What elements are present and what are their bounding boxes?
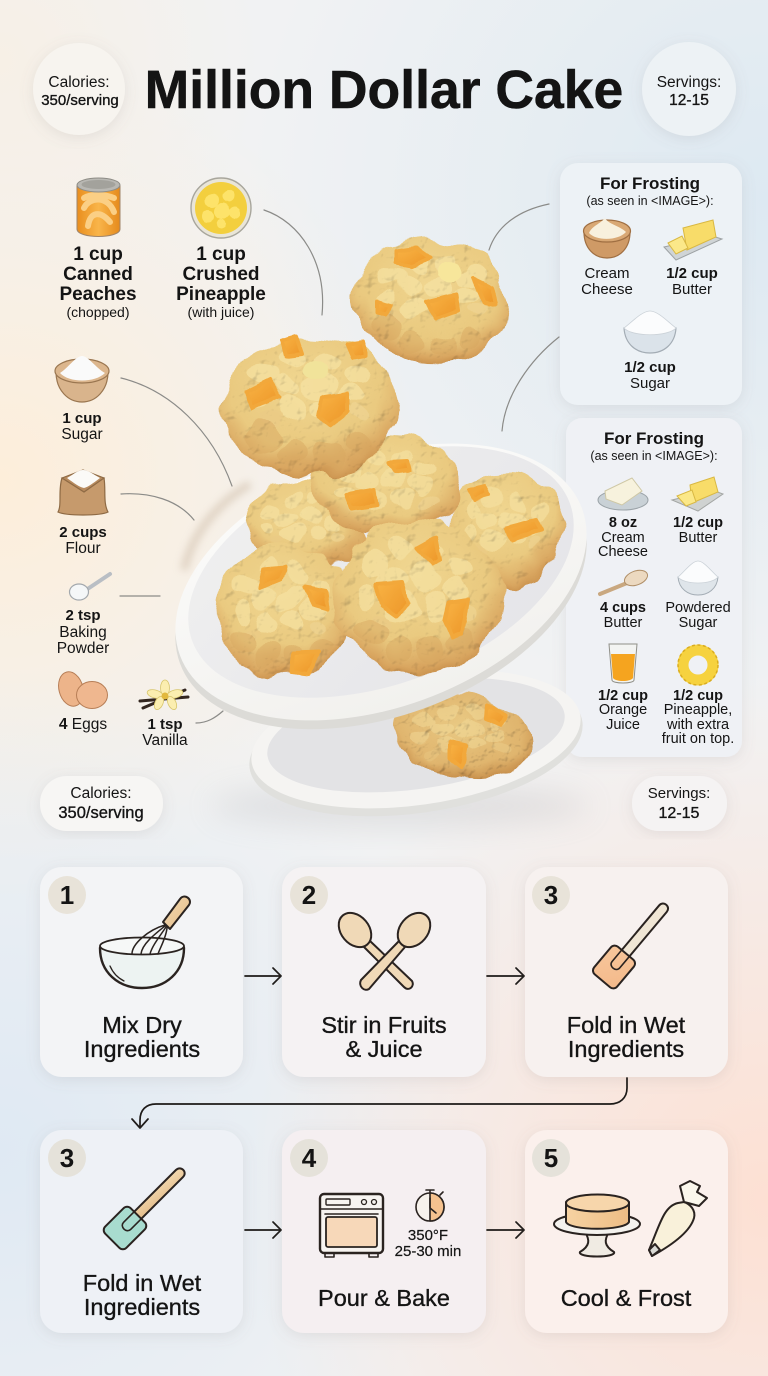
- ingredient: sugar: [55, 356, 109, 443]
- badge: calories top: [33, 43, 125, 135]
- icon: cream cheese bowl: [584, 218, 630, 258]
- panel: frosting two: with extra: [666, 717, 730, 733]
- step number: 2: [302, 880, 316, 910]
- icon: whisk in bowl: [100, 897, 190, 988]
- badge: calories top: Calories:: [48, 74, 110, 91]
- plate cookie: top middle: [314, 435, 462, 535]
- panel: frosting one: [560, 163, 742, 405]
- step number: 5: [544, 1143, 558, 1173]
- panel: frosting two: fruit on top.: [662, 731, 734, 747]
- leader lines: [120, 204, 559, 723]
- panel: frosting two: Butter: [679, 530, 718, 546]
- panel: frosting two: Powdered: [665, 600, 731, 616]
- icon: peach can: [77, 178, 120, 236]
- ingredient: baking powder: Baking: [59, 624, 107, 641]
- ingredient: crushed pineapple: (with juice): [188, 304, 254, 320]
- ingredient: vanilla: 1 tsp: [147, 716, 183, 733]
- badge: servings top: [642, 42, 736, 136]
- step 3 second card: Fold in Wet: [83, 1270, 202, 1296]
- floating cookie: top right: [346, 230, 516, 374]
- ingredient: crushed pineapple: Crushed: [182, 264, 260, 285]
- panel: frosting two: 4 cups: [600, 600, 646, 616]
- step number: [290, 876, 328, 914]
- ingredient: flour: Flour: [65, 540, 101, 557]
- ingredient: sugar: Sugar: [61, 426, 103, 443]
- panel: frosting two: [566, 418, 742, 757]
- arrow 4 to 5: [487, 1222, 524, 1238]
- panel: frosting one: Sugar: [630, 375, 670, 392]
- icon: cream cheese block: [598, 478, 648, 510]
- step number: 3: [60, 1143, 74, 1173]
- panel: frosting two: For Frosting: [604, 429, 704, 448]
- step number: [48, 1139, 86, 1177]
- badge: servings top: Servings:: [657, 74, 721, 91]
- connector arrow row 1 to row 2: [132, 1078, 627, 1128]
- hero: cookies and plates: [137, 230, 625, 836]
- step number: 4: [302, 1143, 317, 1173]
- icon: powdered sugar bowl: [678, 561, 718, 595]
- icon: orange spatula: [591, 895, 678, 990]
- plate shadow: [210, 784, 590, 828]
- ingredient: canned peaches: Peaches: [59, 284, 137, 305]
- panel: frosting one: 1/2 cup: [666, 265, 718, 282]
- icon: cake on stand: [554, 1194, 640, 1256]
- floating cookie: left: [222, 336, 398, 476]
- step number: [48, 876, 86, 914]
- ingredient: canned peaches: (chopped): [66, 304, 130, 320]
- ingredient: eggs: [55, 669, 108, 733]
- step 3 second card: [40, 1130, 243, 1333]
- pill: calories: Calories:: [70, 785, 132, 802]
- ingredient: eggs: 4 Eggs: [59, 716, 107, 733]
- step 3 second card: Ingredients: [84, 1294, 200, 1320]
- step 1 card: Mix Dry: [102, 1012, 182, 1038]
- badge: servings top: 12-15: [669, 92, 709, 109]
- step 5 card: [525, 1130, 728, 1333]
- cookie under plate: [384, 679, 540, 791]
- pill: servings: Servings:: [648, 785, 710, 802]
- ingredient: crushed pineapple: [176, 178, 266, 320]
- ingredient: vanilla: Vanilla: [142, 732, 188, 749]
- panel: frosting one: Cream: [584, 265, 630, 282]
- ingredient: vanilla: [140, 680, 188, 749]
- panel: frosting two: 8 oz: [609, 515, 637, 531]
- icon: measuring spoon: [70, 574, 110, 600]
- icon: eggs: [55, 669, 108, 709]
- step 2 card: Stir in Fruits: [321, 1012, 447, 1038]
- step 5 card: Cool & Frost: [561, 1285, 692, 1311]
- step 1 card: Ingredients: [84, 1036, 200, 1062]
- ingredient: canned peaches: Canned: [63, 264, 133, 285]
- step 4 card: 25-30 min: [395, 1243, 461, 1260]
- plate cookie: back left: [245, 480, 365, 570]
- icon: sugar bowl: [55, 356, 109, 402]
- step 1 card: [40, 867, 243, 1077]
- panel: frosting one: Butter: [672, 281, 712, 298]
- ingredient: canned peaches: [59, 178, 137, 320]
- icon: piping bag: [649, 1181, 707, 1256]
- panel: frosting two: (as seen in <IMAGE>):: [590, 449, 718, 463]
- panel: frosting two: Cream: [601, 530, 645, 546]
- icon: flour sack: [58, 470, 108, 515]
- step number: 3: [544, 880, 558, 910]
- panel: frosting two: Sugar: [679, 615, 718, 631]
- icon: pineapple ring: [678, 645, 718, 685]
- pill: servings: 12-15: [659, 805, 700, 822]
- badge: calories top: 350/serving: [41, 92, 119, 109]
- panel: frosting one: For Frosting: [600, 174, 700, 193]
- panel: frosting two: Orange: [599, 702, 647, 718]
- ingredient: baking powder: 2 tsp: [65, 607, 101, 624]
- plate cookie: left: [213, 546, 353, 678]
- step 4 card: 350°F: [408, 1227, 448, 1244]
- step 3 card: Ingredients: [568, 1036, 684, 1062]
- step 2 card: [282, 867, 486, 1077]
- icon: oven: [320, 1194, 383, 1257]
- panel: frosting one: 1/2 cup: [624, 359, 676, 376]
- icon: orange juice glass: [609, 644, 637, 683]
- step number: [290, 1139, 328, 1177]
- arrow 2 to 3: [487, 968, 524, 984]
- icon: wooden spoon: [600, 567, 650, 594]
- plate cookie: right: [447, 475, 563, 585]
- icon: vanilla flower and beans: [140, 680, 188, 711]
- step number: [532, 876, 570, 914]
- step number: [532, 1139, 570, 1177]
- icon: mint spatula: [102, 1159, 194, 1251]
- step 4 card: Pour & Bake: [318, 1285, 450, 1311]
- ingredient: baking powder: Powder: [57, 640, 109, 657]
- ingredient: baking powder: [57, 574, 110, 657]
- panel: frosting two: 1/2 cup: [598, 688, 648, 704]
- panel: frosting two: Juice: [606, 717, 640, 733]
- ingredient: crushed pineapple: Pineapple: [176, 284, 266, 305]
- icon: crossed wooden spoons: [332, 906, 437, 990]
- title: Million Dollar Cake: [145, 61, 623, 120]
- pill: calories: 350/serving: [58, 804, 144, 822]
- panel: frosting two: 1/2 cup: [673, 688, 723, 704]
- panel: frosting one: (as seen in <IMAGE>):: [586, 194, 714, 208]
- step 3 card: Fold in Wet: [567, 1012, 686, 1038]
- main plate: [137, 391, 625, 782]
- pill: calories: [40, 776, 163, 831]
- icon: pineapple bowl: [191, 178, 251, 238]
- icon: butter on dish: [664, 220, 722, 260]
- panel: frosting two: Pineapple,: [664, 702, 732, 718]
- ingredient: flour: [58, 470, 108, 557]
- lower plate: [240, 651, 592, 836]
- step number: 1: [60, 880, 74, 910]
- panel: frosting one: Cheese: [581, 281, 633, 298]
- ingredient: canned peaches: 1 cup: [73, 244, 123, 265]
- icon: butter on tray: [672, 477, 723, 511]
- ingredient: crushed pineapple: 1 cup: [196, 244, 246, 265]
- arrow 3 to 4: [245, 1222, 281, 1238]
- panel: frosting two: Cheese: [598, 544, 648, 560]
- panel: frosting two: 1/2 cup: [673, 515, 723, 531]
- step 4 card: [282, 1130, 486, 1333]
- icon: sugar glass bowl: [624, 311, 676, 353]
- ingredient: sugar: 1 cup: [62, 410, 102, 427]
- ingredient: flour: 2 cups: [59, 524, 107, 541]
- step 2 card: & Juice: [345, 1036, 423, 1062]
- arrow 1 to 2: [245, 968, 281, 984]
- step 3 card: [525, 867, 728, 1077]
- plate cookie: front: [333, 519, 503, 675]
- panel: frosting two: Butter: [604, 615, 643, 631]
- pill: servings: [632, 776, 727, 831]
- icon: timer: [416, 1190, 444, 1221]
